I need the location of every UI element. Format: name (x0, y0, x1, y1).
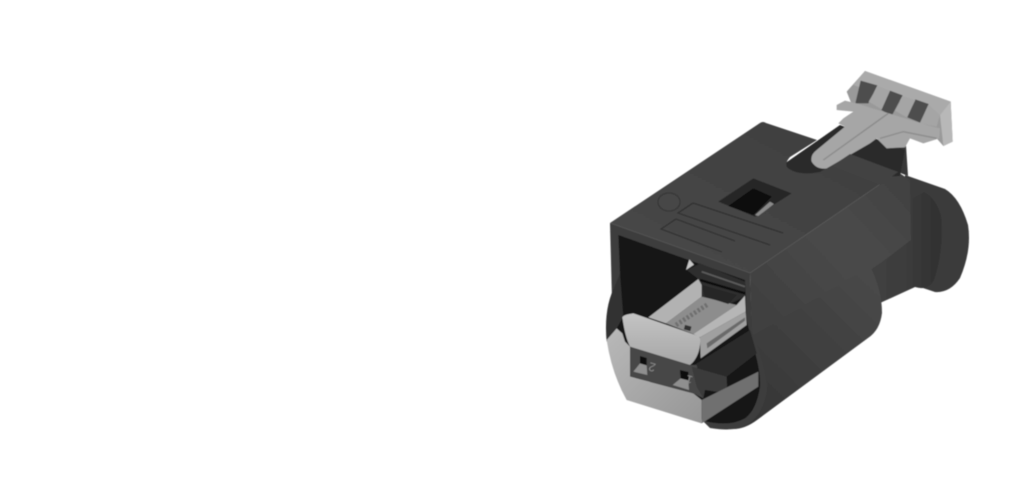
bottom side strip (702, 372, 758, 423)
slot floor (784, 125, 905, 180)
lower body bulge (715, 266, 882, 429)
top face (610, 122, 898, 273)
tube rim left (606, 273, 623, 342)
side face (750, 172, 911, 345)
window in top face (718, 178, 792, 217)
latch handle (811, 101, 940, 169)
rear wedge behind latch (845, 130, 908, 176)
light front shell (607, 328, 702, 423)
dark rear of cavity (692, 330, 757, 377)
upper shelf inside housing (687, 263, 745, 304)
marker circle (658, 193, 680, 211)
top face overlap at handle tip (832, 154, 898, 185)
side of tray with slot (700, 312, 747, 358)
lower connector group (606, 235, 760, 424)
label recess lines (661, 203, 783, 252)
number 1: 1 (685, 372, 694, 385)
tray left rim (648, 279, 702, 323)
latch comb (847, 71, 953, 146)
contact 2 (633, 363, 647, 375)
dark lower latch block (692, 367, 727, 398)
dark window (630, 347, 703, 398)
top front plate (622, 313, 700, 365)
tray right rim (693, 296, 746, 337)
contact 1 (673, 378, 689, 390)
dark inner opening (610, 235, 760, 424)
front frame (610, 223, 767, 429)
number 2: 2 (647, 359, 657, 375)
rear flange (850, 175, 969, 303)
tray floor (666, 297, 737, 334)
